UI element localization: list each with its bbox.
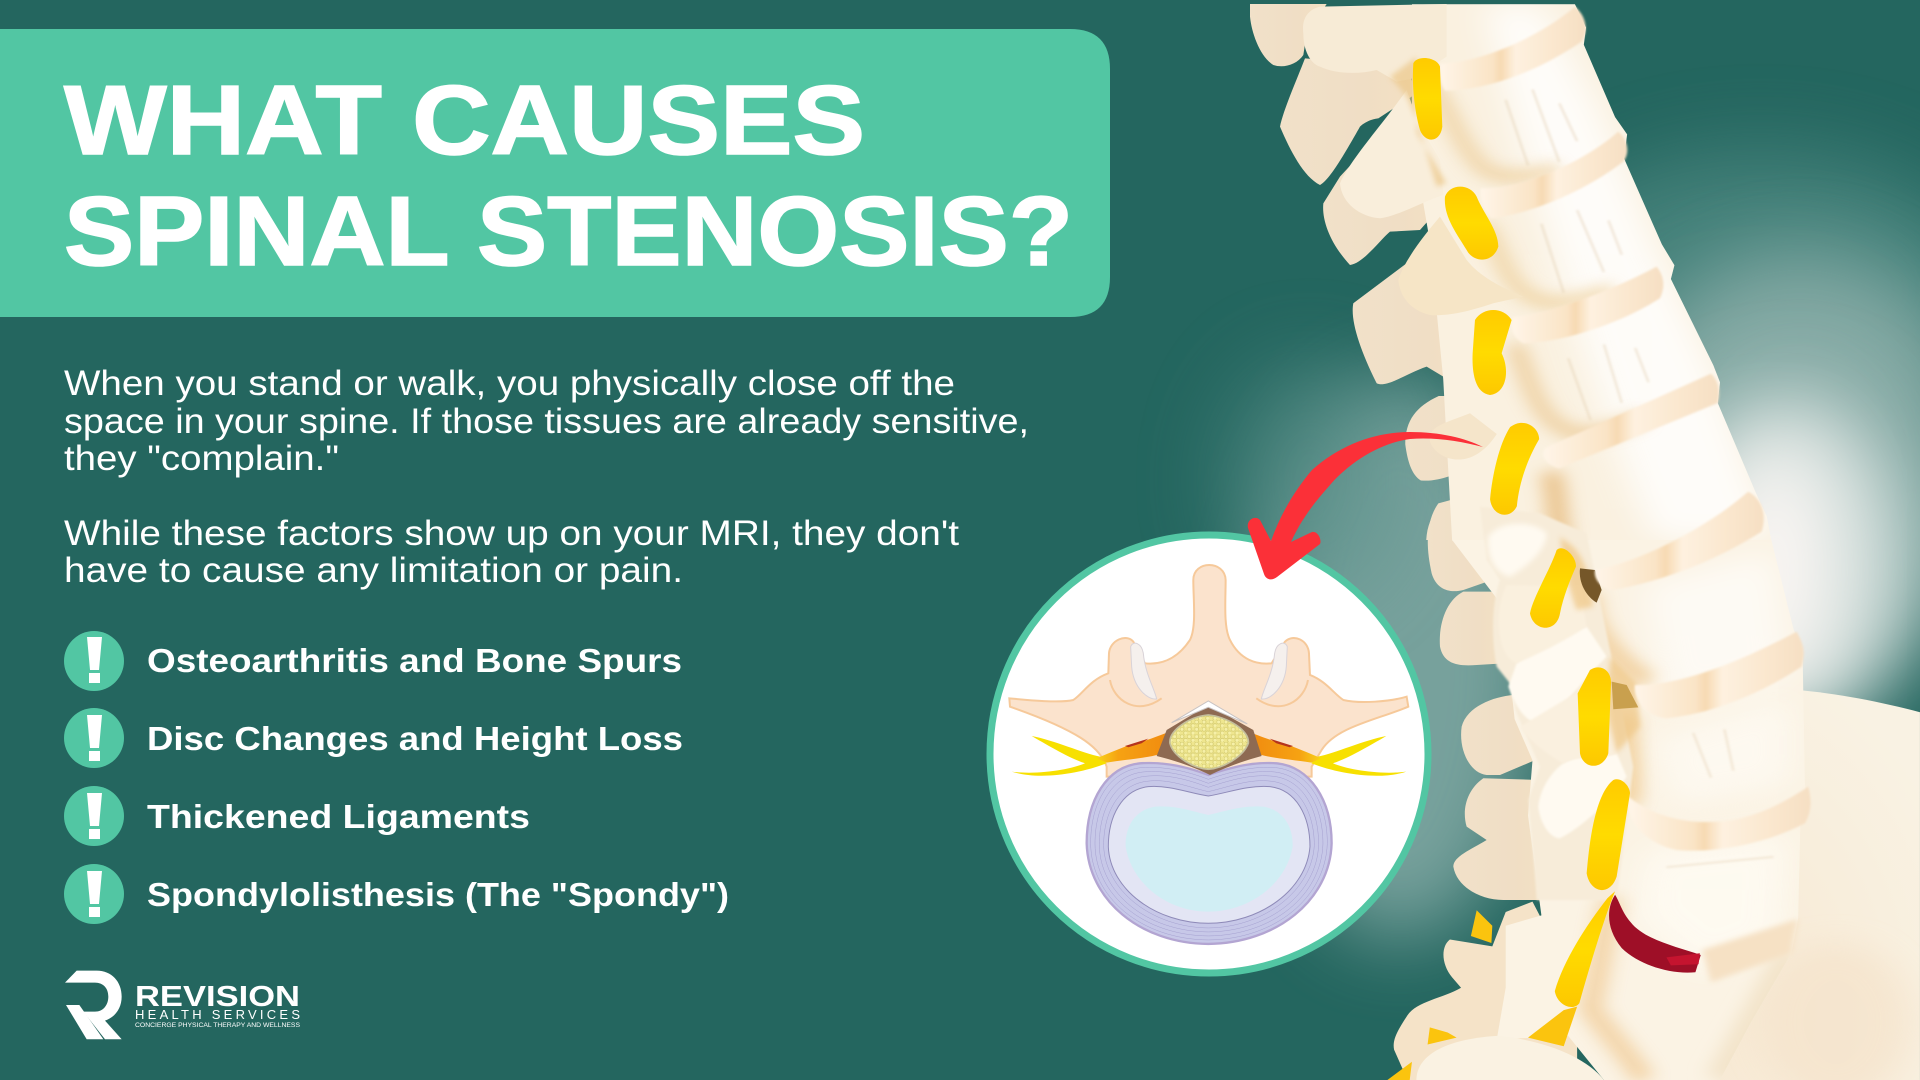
intervertebral discs upper bbox=[1440, 7, 1663, 343]
list item: ligaments bbox=[64, 786, 530, 846]
intervertebral disc middle bbox=[1543, 374, 1719, 468]
title bbox=[64, 65, 1073, 286]
vertebral column lower bbox=[1452, 540, 1804, 1080]
list item: ligaments: Thickened Ligaments bbox=[147, 798, 530, 835]
spinous processes upper (crop coordinates) bbox=[1250, 4, 1443, 384]
intro paragraph: space in your spine. If those tissues are already sensitive, bbox=[64, 402, 1029, 441]
pelvis bowl bbox=[1720, 690, 1920, 1080]
vertebra bone bbox=[1009, 565, 1408, 777]
spinal canal bbox=[1157, 705, 1262, 775]
nerve root middle bbox=[1490, 423, 1539, 515]
spine model photo illustration bbox=[1250, 0, 1920, 1080]
intro paragraph: they "complain." bbox=[64, 439, 339, 478]
small nerve branches bbox=[1387, 910, 1577, 1080]
intro paragraph: When you stand or walk, you physically close off the bbox=[64, 364, 955, 403]
facet joints bbox=[1131, 643, 1287, 699]
cause list bbox=[64, 631, 729, 924]
vertebral column upper bbox=[1412, 4, 1771, 540]
nucleus bbox=[1126, 806, 1293, 912]
list item: disc changes bbox=[64, 708, 683, 768]
ligament white cap bbox=[1172, 701, 1247, 724]
second paragraph bbox=[64, 514, 959, 590]
vertebra and disc diagram bbox=[1009, 565, 1408, 944]
red arrow bbox=[1248, 432, 1483, 579]
list item: spondylolisthesis: Spondylolisthesis (The "Spondy") bbox=[147, 876, 729, 913]
long sacral nerve bbox=[1555, 891, 1615, 1007]
disc annulus bbox=[1087, 763, 1332, 944]
nerve roots lower bbox=[1530, 548, 1630, 890]
icon: R mark bbox=[65, 971, 122, 1039]
disc inner bbox=[1108, 786, 1310, 923]
spinous processes lower (crop coordinates) bbox=[1428, 497, 1550, 900]
sacral nerves, herniation and dome bbox=[1387, 891, 1701, 1080]
logo: CONCIERGE PHYSICAL THERAPY AND WELLNESS bbox=[135, 1022, 301, 1029]
sacral processes bbox=[1394, 902, 1577, 1080]
lower band on fifth vertebra bbox=[1702, 919, 1798, 983]
title: WHAT CAUSES bbox=[64, 65, 865, 175]
logo: REVISION bbox=[135, 981, 300, 1013]
spinous processes mid bbox=[1405, 396, 1449, 540]
articular facets lower bbox=[1480, 507, 1640, 900]
background mist bbox=[1220, 150, 1920, 940]
articular facets middle bbox=[1446, 414, 1496, 460]
second paragraph: have to cause any limitation or pain. bbox=[64, 551, 683, 590]
title: SPINAL STENOSIS? bbox=[64, 176, 1073, 286]
list item: spondylolisthesis bbox=[64, 864, 729, 924]
list item: osteoarthritis bbox=[64, 631, 682, 691]
list item: disc changes: Disc Changes and Height Loss bbox=[147, 720, 683, 757]
logo bbox=[65, 971, 301, 1039]
spinal cord bbox=[1170, 715, 1248, 769]
nerve roots upper bbox=[1413, 58, 1512, 395]
header banner bbox=[0, 29, 1110, 317]
annulus rings bbox=[1091, 767, 1327, 940]
articular facets upper bbox=[1303, 4, 1523, 315]
sacrum dome bbox=[1416, 1036, 1604, 1080]
list item: osteoarthritis: Osteoarthritis and Bone Spurs bbox=[147, 642, 682, 679]
red disc herniation bbox=[1609, 895, 1701, 973]
logo: HEALTH SERVICES bbox=[135, 1007, 300, 1022]
intro paragraph bbox=[64, 364, 1029, 478]
spinal cross-section circle bbox=[990, 535, 1428, 973]
intervertebral discs lower bbox=[1580, 492, 1810, 851]
compressed nerve roots bbox=[1097, 732, 1321, 763]
foramen nerves yellow bbox=[1012, 736, 1406, 776]
second paragraph: While these factors show up on your MRI, they don't bbox=[64, 514, 959, 553]
